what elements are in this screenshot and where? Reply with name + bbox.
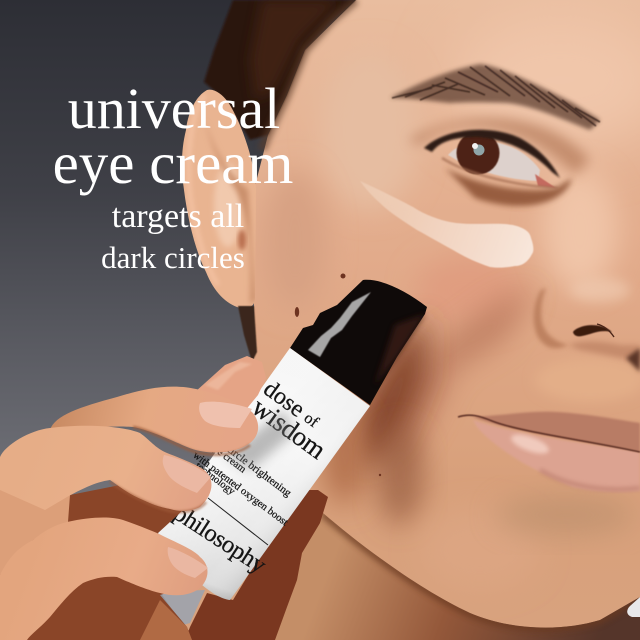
eyebrow	[390, 64, 600, 130]
nose	[534, 278, 640, 372]
lower lip shade	[540, 470, 640, 489]
subtitle line two: dark circles	[101, 240, 245, 275]
description line four: technology	[193, 461, 237, 498]
description line three: with patented oxygen boost	[191, 450, 290, 528]
nose wing shadow	[534, 288, 568, 348]
back of hand	[0, 457, 70, 575]
lip parting line	[458, 415, 640, 452]
product name wisdom: wisdom	[246, 392, 332, 465]
bottle body	[158, 348, 370, 600]
upper lash line	[424, 130, 560, 178]
lips	[458, 412, 640, 492]
neck fill	[275, 513, 640, 640]
ear notch	[238, 230, 246, 250]
hand	[0, 356, 266, 640]
collar brown glow	[375, 314, 425, 385]
cream swatch	[360, 181, 533, 268]
catchlight	[472, 143, 478, 149]
mole three	[379, 474, 381, 476]
inner ear shading	[214, 163, 242, 247]
lip highlight	[509, 431, 551, 457]
lower lip	[473, 420, 640, 492]
shadow under finger three	[110, 482, 206, 512]
back fingertip	[195, 356, 266, 412]
face and neck	[175, 0, 640, 640]
eye area	[408, 118, 590, 206]
ear	[182, 90, 256, 308]
pupil highlight	[474, 144, 484, 156]
finger three	[0, 426, 211, 511]
hair mass	[204, 0, 356, 140]
thumb and palm behind bottle	[185, 490, 328, 640]
skin shading	[269, 20, 640, 538]
iris	[456, 132, 500, 174]
nail two	[199, 402, 252, 428]
ear shape	[182, 90, 256, 308]
soft hairline	[262, 0, 356, 150]
finger shadow on bottle	[225, 410, 292, 470]
title line one: universal	[68, 76, 280, 141]
white object at lower right	[627, 597, 640, 617]
mole two	[340, 274, 346, 278]
ear rim light	[189, 95, 218, 285]
ear fold shadow	[210, 139, 255, 304]
headline text	[53, 76, 293, 275]
shadow under finger two	[133, 427, 250, 455]
finger four	[0, 518, 208, 640]
nostril edge	[597, 324, 614, 337]
lower palm skin	[140, 600, 192, 640]
mole one	[295, 307, 299, 317]
brow hairs	[392, 66, 600, 126]
description line one: dark circle brightening	[206, 430, 294, 500]
cap reflection	[308, 292, 371, 357]
eye corner	[535, 174, 556, 188]
subtitle line one: targets all	[112, 198, 244, 235]
product name of: of	[301, 409, 322, 431]
eyelid shading	[408, 118, 590, 175]
bottle	[158, 280, 427, 600]
neck below jaw	[275, 513, 640, 640]
eye white	[448, 141, 540, 181]
nose highlight	[570, 278, 630, 302]
dark palm between fingers	[0, 480, 205, 640]
jaw shadow	[323, 513, 640, 628]
face edge shadow	[626, 348, 640, 372]
moles	[295, 274, 381, 476]
nail three	[163, 455, 211, 493]
upper lip	[466, 412, 640, 452]
nostril	[573, 325, 612, 336]
nail four	[168, 547, 208, 578]
bottle shine	[158, 348, 370, 600]
background sliver under hand	[160, 590, 205, 625]
finger two	[50, 387, 258, 453]
bottle label text	[169, 376, 332, 579]
socket shadow	[445, 168, 572, 206]
description line two: eye cream	[207, 441, 248, 475]
brow body	[390, 64, 600, 130]
nose underside	[568, 341, 640, 362]
product name dose: dose	[258, 376, 309, 423]
brand name: philosophy	[169, 499, 272, 579]
hair	[204, 0, 356, 150]
divider on label	[208, 498, 268, 545]
title line two: eye cream	[53, 130, 293, 196]
lower lid	[442, 158, 558, 188]
skin base	[175, 0, 640, 640]
hair wisp behind ear	[238, 306, 257, 362]
back fingertip shading	[205, 362, 252, 390]
pump cap	[290, 280, 427, 405]
hair reddish strands	[250, 0, 340, 100]
